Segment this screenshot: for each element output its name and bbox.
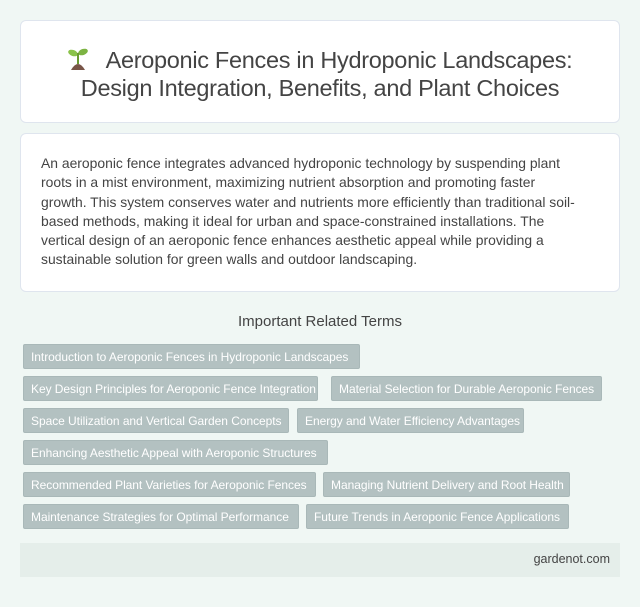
description text: roots in a mist environment, maximizing nutrient absorption and promoting faster	[41, 174, 535, 190]
tag 10: Future Trends in Aeroponic Fence Applications	[314, 510, 560, 524]
tag 6	[23, 440, 328, 465]
icon: seedling	[68, 48, 88, 70]
tag 1: Introduction to Aeroponic Fences in Hydroponic Landscapes	[31, 350, 348, 364]
tag 4	[23, 408, 289, 433]
tag 9: Maintenance Strategies for Optimal Performance	[31, 510, 289, 524]
description text: An aeroponic fence integrates advanced hydroponic technology by suspending plant	[41, 155, 560, 171]
footer text: gardenot.com: gardenot.com	[534, 552, 610, 566]
tag 7	[23, 472, 316, 497]
description card	[20, 133, 620, 292]
tag 5: Energy and Water Efficiency Advantages	[305, 414, 520, 428]
tag 2	[23, 376, 318, 401]
tag 10	[306, 504, 569, 529]
tag 7: Recommended Plant Varieties for Aeroponic Fences	[31, 478, 307, 492]
description text	[41, 155, 575, 267]
tag 4: Space Utilization and Vertical Garden Concepts	[31, 414, 282, 428]
description text: based methods, making it ideal for urban and space-constrained installations. The	[41, 213, 544, 229]
tag 5	[297, 408, 524, 433]
tag 3: Material Selection for Durable Aeroponic Fences	[339, 382, 594, 396]
tag 8: Managing Nutrient Delivery and Root Health	[331, 478, 564, 492]
tag 6: Enhancing Aesthetic Appeal with Aeroponic Structures	[31, 446, 317, 460]
tag 1	[23, 344, 360, 369]
tag 9	[23, 504, 299, 529]
title: Design Integration, Benefits, and Plant Choices	[81, 75, 559, 101]
tag 8	[323, 472, 570, 497]
description text: vertical design of an aeroponic fence enhances aesthetic appeal while providing a	[41, 232, 544, 248]
title card	[20, 20, 620, 123]
heading: important related terms: Important Related Terms	[238, 313, 402, 330]
description text: growth. This system conserves water and nutrients more efficiently than traditional soil-	[41, 194, 575, 210]
tag 3	[331, 376, 602, 401]
footer	[20, 543, 620, 577]
title	[68, 47, 572, 101]
description text: sustainable solution for green walls and outdoor landscaping.	[41, 251, 417, 267]
title: Aeroponic Fences in Hydroponic Landscapes:	[106, 47, 572, 73]
tag 2: Key Design Principles for Aeroponic Fence Integration	[31, 382, 316, 396]
